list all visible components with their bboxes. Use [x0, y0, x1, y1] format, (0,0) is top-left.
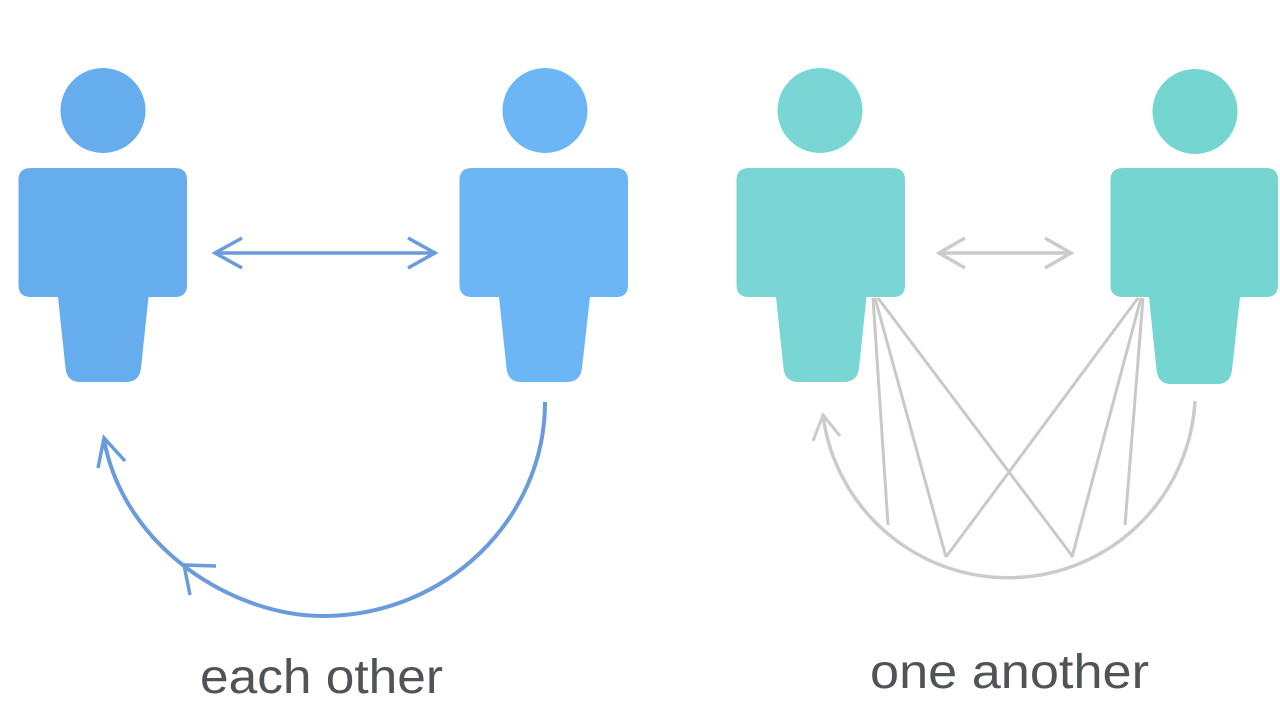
arrow: blue double-headed [215, 238, 435, 268]
person: blue right [460, 68, 628, 382]
person: blue left [18, 68, 187, 382]
arrow: blue curved [98, 402, 545, 616]
label: one another: one another [870, 646, 1149, 699]
grey connecting lines [873, 298, 1143, 557]
arrow: grey curved [813, 401, 1195, 578]
label: each other: each other [200, 651, 443, 704]
arrow: grey double-headed [939, 238, 1071, 268]
person: teal right [1110, 69, 1278, 384]
person: teal left [736, 68, 905, 382]
